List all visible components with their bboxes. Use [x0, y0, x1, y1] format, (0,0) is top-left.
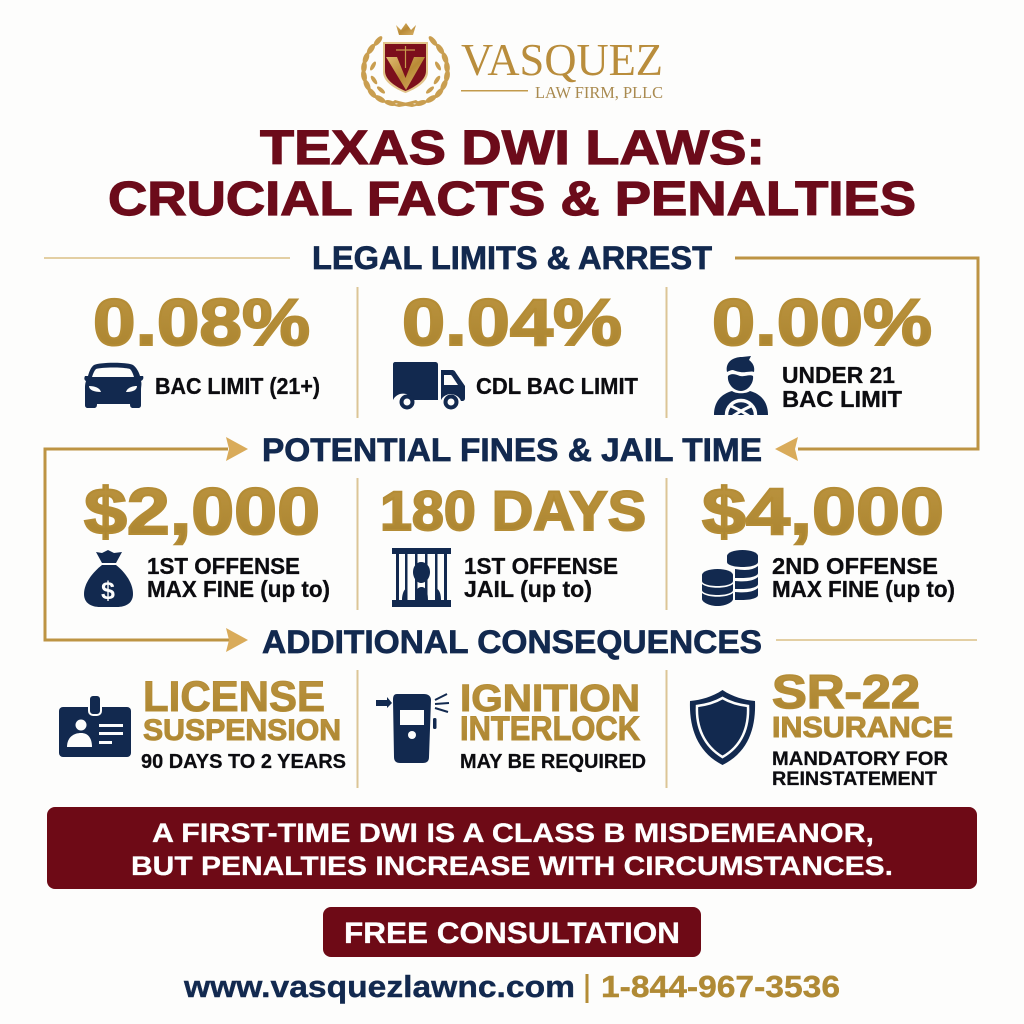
text — [460, 678, 646, 773]
callout banner: BUT PENALTIES INCREASE WITH CIRCUMSTANCES. — [131, 851, 893, 881]
text: INSURANCE — [772, 712, 953, 744]
text: SUSPENSION — [143, 714, 341, 747]
title — [108, 122, 916, 226]
label — [464, 553, 618, 602]
label: 1ST OFFENSE — [147, 553, 300, 579]
text — [141, 673, 346, 773]
logo subtitle: LAW FIRM, PLLC — [535, 83, 663, 102]
label: MAX FINE (up to) — [147, 576, 330, 602]
heading: additional consequences: ADDITIONAL CONSEQUENCES — [262, 624, 762, 660]
panel: license suspension — [59, 673, 346, 773]
panel: $4,000 — [702, 474, 955, 606]
text: MAY BE REQUIRED — [460, 751, 646, 773]
text: INTERLOCK — [460, 710, 640, 748]
panel: SR-22 insurance — [690, 665, 953, 790]
label: 1ST OFFENSE — [464, 553, 618, 579]
icon: shield — [690, 690, 755, 765]
title: CRUCIAL FACTS & PENALTIES — [108, 173, 916, 226]
icon: car — [84, 363, 143, 408]
dividers — [356, 287, 668, 788]
text: IGNITION — [460, 678, 640, 720]
logo rule — [461, 90, 528, 92]
text — [772, 665, 953, 790]
panel: 0.08%: 0.08% — [93, 285, 310, 359]
panel: $4,000: $4,000 — [702, 474, 944, 548]
callout banner — [47, 807, 977, 889]
heading: fines and jail: POTENTIAL FINES & JAIL TIME — [262, 432, 762, 468]
panel: $2,000: $2,000 — [84, 474, 320, 548]
footer contact: www.vasquezlawnc.com — [183, 969, 575, 1004]
text: MANDATORY FOR — [772, 749, 948, 770]
panel: 0.08% — [84, 285, 320, 408]
panel: 0.04% — [393, 285, 638, 410]
button: free consultation: FREE CONSULTATION — [344, 917, 680, 950]
text: SR-22 — [772, 665, 920, 718]
panel: 180 days — [380, 479, 646, 607]
panel: ignition interlock — [376, 678, 646, 773]
panel: 180 days: 180 DAYS — [380, 479, 646, 542]
logo: Vasquez Law Firm — [360, 23, 663, 107]
label: BAC LIMIT — [782, 386, 902, 412]
callout banner: A FIRST-TIME DWI IS A CLASS B MISDEMEANOR, — [152, 818, 874, 848]
icon: crown — [396, 23, 416, 35]
label — [772, 553, 955, 602]
icon: driver — [714, 356, 768, 415]
label: JAIL (up to) — [464, 576, 592, 602]
connector lines and arrows — [44, 257, 978, 652]
text: LICENSE — [143, 673, 325, 721]
footer contact: 1-844-967-3536 — [601, 969, 840, 1004]
icon: truck — [393, 362, 465, 410]
label: UNDER 21 — [782, 362, 895, 388]
logo wordmark: VASQUEZ — [461, 35, 663, 85]
button: free consultation — [323, 907, 701, 957]
heading: legal limits: LEGAL LIMITS & ARREST — [312, 240, 712, 276]
panel: 0.04%: 0.04% — [402, 285, 622, 359]
label: CDL BAC LIMIT — [476, 373, 638, 399]
title: TEXAS DWI LAWS: — [260, 122, 765, 175]
icon: ID badge — [59, 695, 131, 757]
panel: 0.00%: 0.00% — [712, 285, 932, 359]
panel: 0.00% — [714, 298, 932, 415]
label: 2ND OFFENSE — [772, 553, 938, 579]
icon: breathalyzer — [376, 694, 449, 763]
icon: money bag — [84, 550, 133, 607]
label — [782, 362, 902, 412]
icon: coin stacks — [702, 550, 758, 606]
icon: shield with V — [383, 42, 428, 93]
label — [147, 553, 330, 602]
panel: $2,000 — [84, 474, 330, 607]
text: REINSTATEMENT — [772, 769, 937, 790]
footer contact — [183, 969, 840, 1004]
icon: laurel wreath — [360, 35, 451, 107]
icon: jail — [392, 548, 451, 607]
label: BAC LIMIT (21+) — [155, 373, 320, 399]
text: 90 DAYS TO 2 YEARS — [141, 751, 346, 773]
icon: money bag: $ — [101, 577, 115, 605]
label: MAX FINE (up to) — [772, 576, 955, 602]
